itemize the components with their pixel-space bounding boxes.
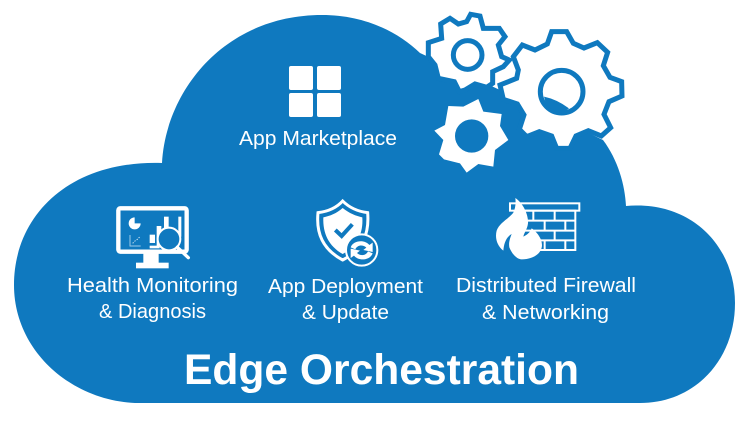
label: App Deployment & Update: & Update	[302, 302, 389, 324]
gear: large right	[500, 32, 622, 148]
icon: shield with check and refresh	[318, 201, 377, 266]
label: Distributed Firewall & Networking: Distributed Firewall	[456, 275, 636, 297]
label: Health Monitoring & Diagnosis	[67, 275, 238, 323]
label: Distributed Firewall & Networking: & Networking	[482, 302, 609, 324]
icon: firewall with flame	[496, 198, 579, 259]
icon: app grid	[289, 66, 341, 117]
label: App Deployment & Update	[268, 276, 423, 324]
label: App Deployment & Update: App Deployment	[268, 276, 423, 298]
label: Health Monitoring & Diagnosis: & Diagnosis	[99, 301, 206, 323]
label: App Marketplace: App Marketplace	[239, 128, 397, 150]
gear: small bottom	[434, 99, 508, 173]
title: Edge Orchestration	[184, 346, 579, 394]
label: Health Monitoring & Diagnosis: Health Monitoring	[67, 275, 238, 297]
gear: top left	[428, 14, 509, 92]
gears	[428, 14, 622, 173]
label: Distributed Firewall & Networking	[456, 275, 636, 324]
icon: monitor with magnifier	[118, 208, 188, 268]
